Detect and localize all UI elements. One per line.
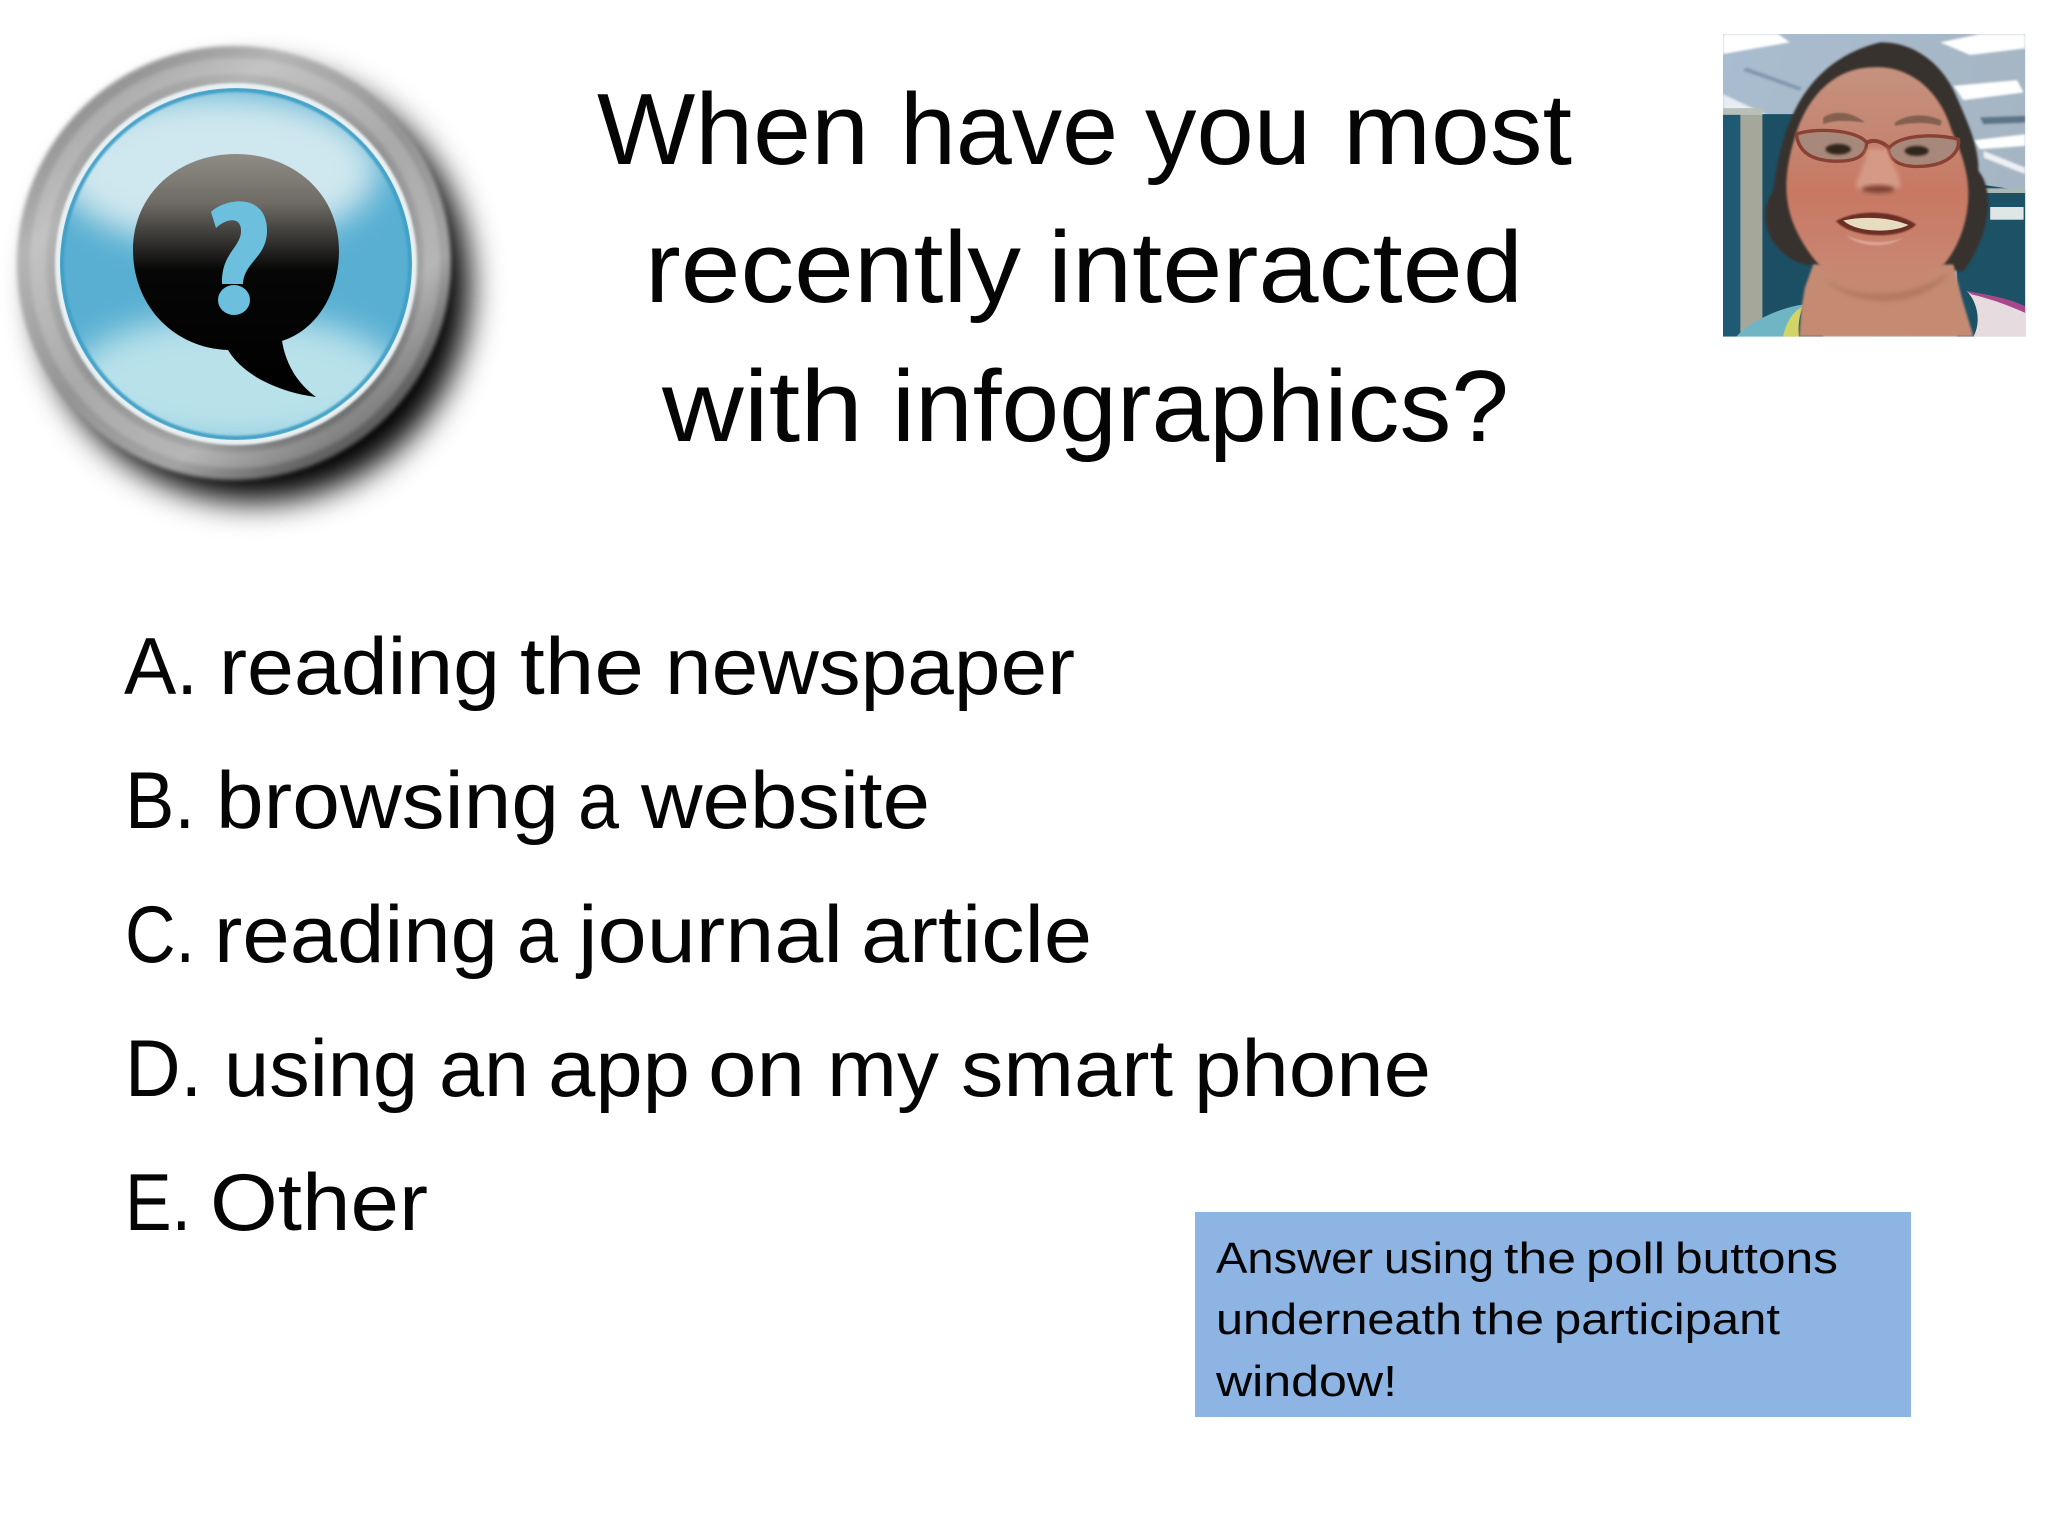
photo eyes (1826, 144, 1851, 155)
option A (124, 622, 1075, 712)
option B (125, 756, 930, 846)
option B: browsing (216, 756, 559, 846)
photo face (1786, 67, 1968, 294)
option D (125, 1024, 1431, 1114)
title: most (1343, 74, 1572, 186)
option C: C. (125, 890, 195, 980)
callout: poll instructions: participant (1554, 1295, 1780, 1344)
title: you (1145, 74, 1311, 186)
title: have (900, 74, 1118, 186)
photo smile (1836, 213, 1916, 235)
callout: poll instructions: window! (1215, 1357, 1397, 1406)
title: infographics? (892, 351, 1509, 463)
title: with (661, 351, 863, 463)
callout: poll instructions: poll (1586, 1234, 1665, 1283)
option E: E. (125, 1158, 191, 1248)
option D: my (827, 1024, 940, 1114)
callout: poll instructions: Answer (1216, 1234, 1373, 1283)
option C: a (517, 890, 559, 980)
photo glasses (1796, 130, 1959, 166)
option D: on (708, 1024, 805, 1114)
option C: article (861, 890, 1092, 980)
option A: the (520, 622, 644, 712)
option B: a (578, 756, 620, 846)
option C (125, 890, 1092, 980)
option A: newspaper (665, 622, 1075, 712)
option C: journal (576, 890, 843, 980)
icon speech bubble (133, 154, 339, 397)
option D: an (439, 1024, 529, 1114)
poll answer options (124, 622, 1431, 1248)
option D: using (224, 1024, 418, 1114)
callout: poll instructions: the (1504, 1234, 1576, 1283)
option B: website (640, 756, 930, 846)
title: interacted (1048, 212, 1523, 324)
title (597, 74, 1572, 463)
photo chin shadow (1837, 278, 1943, 302)
callout: poll instructions: underneath (1216, 1295, 1462, 1344)
callout: poll instructions: using (1384, 1234, 1494, 1283)
photo neck and chest (1799, 264, 1974, 337)
option C: reading (214, 890, 498, 980)
option D: phone (1194, 1024, 1431, 1114)
callout: poll instructions: the (1472, 1295, 1544, 1344)
option D: smart (961, 1024, 1173, 1114)
title: recently (645, 212, 1022, 324)
photo eyebrows (1823, 113, 1865, 124)
photo shirt (1736, 305, 1803, 337)
option D: D. (125, 1024, 202, 1114)
icon blue glass face (58, 88, 412, 446)
title: When (597, 74, 869, 186)
callout: poll instructions (1195, 1212, 1911, 1417)
photo: presenter portrait (1723, 34, 2025, 337)
icon: question speech bubble button (17, 46, 470, 502)
option E (125, 1158, 428, 1248)
callout: poll instructions: buttons (1675, 1234, 1838, 1283)
option B: B. (125, 756, 195, 846)
option A: A. (124, 622, 198, 712)
icon metal ring (17, 46, 451, 480)
option E: Other (210, 1158, 428, 1248)
icon shadow (38, 70, 470, 502)
option A: reading (219, 622, 500, 712)
photo nose (1856, 149, 1900, 193)
option D: app (548, 1024, 690, 1114)
icon question mark (211, 201, 267, 284)
photo hair (1765, 42, 1988, 271)
